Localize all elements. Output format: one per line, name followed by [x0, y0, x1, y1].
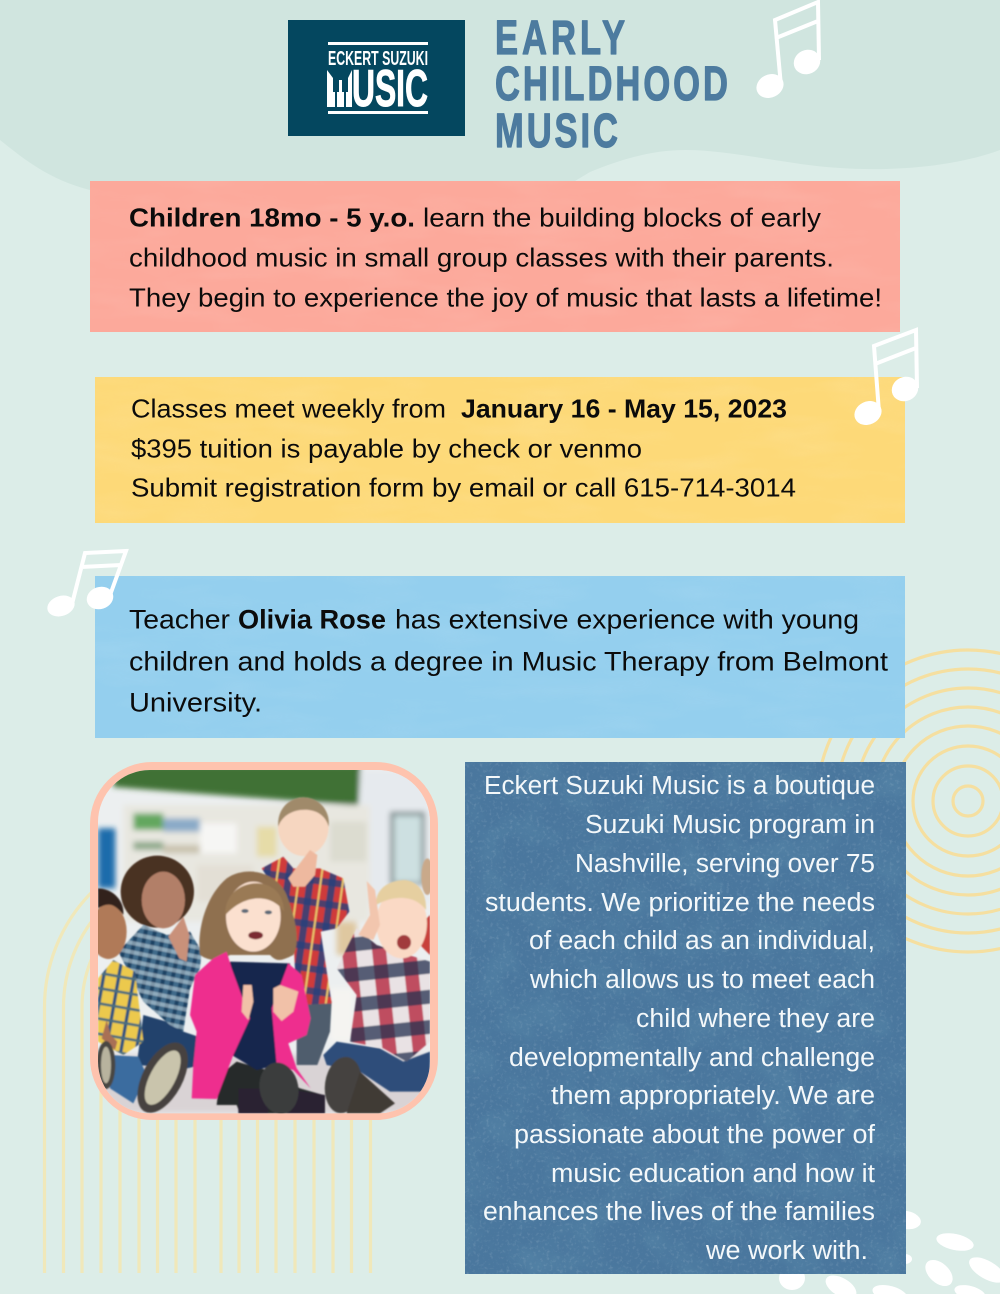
panel: intro: learn the building blocks of early: [423, 202, 821, 232]
panel: about program: them appropriately. We are: [551, 1082, 875, 1110]
panel: about program: Eckert Suzuki Music is a boutique: [484, 772, 875, 800]
title: EARLY: [495, 10, 625, 64]
white dots decoration: [779, 1209, 1000, 1294]
panel: about program: we work with.: [705, 1237, 868, 1265]
concentric circles decoration: [817, 650, 1000, 952]
panel: about program: Suzuki Music program in: [585, 811, 875, 839]
child curly hair: [118, 856, 203, 1068]
panel: about program: Nashville, serving over 75: [575, 850, 875, 878]
title: CHILDHOOD: [495, 56, 728, 110]
panel: about program: of each child as an individual,: [529, 927, 875, 955]
panel: class details: Submit registration form by email or call 615-714-3014: [131, 472, 796, 502]
panel: about program: students. We prioritize the needs: [485, 889, 875, 917]
child far right: [420, 858, 430, 956]
panel: intro: They begin to experience the joy of music that lasts a lifetime!: [129, 282, 882, 312]
panel: about program: music education and how it: [551, 1160, 875, 1188]
child right boy: [323, 880, 430, 1092]
title: [495, 10, 728, 157]
panel: teacher: Teacher: [129, 604, 230, 634]
panel: class details: $395 tuition is payable by check or venmo: [131, 434, 642, 464]
panel: class details: Classes meet weekly from: [131, 394, 446, 424]
child centre girl: [190, 872, 323, 1113]
panel: about program: child where they are: [636, 1005, 875, 1033]
child left boy: [90, 888, 147, 1103]
panel: about program: enhances the lives of the families: [483, 1198, 875, 1226]
panel: intro: childhood music in small group classes with their parents.: [129, 242, 834, 272]
icon: music note middle: [850, 330, 922, 429]
icon: music note left: [45, 551, 126, 620]
panel: teacher: children and holds a degree in Music Therapy from Belmont: [129, 646, 889, 676]
shoes: [98, 1040, 396, 1114]
arches decoration: [44, 844, 370, 1273]
panel: class details: January 16 - May 15, 2023: [461, 394, 787, 424]
panel: about program: which allows us to meet each: [529, 966, 875, 994]
panel: intro: Children 18mo - 5 y.o.: [129, 202, 415, 232]
panel: about program: [465, 762, 906, 1274]
logo: [288, 20, 465, 136]
panel: intro: [90, 181, 900, 332]
panel: teacher: has extensive experience with young: [395, 604, 859, 634]
photo of children clapping: [90, 765, 434, 1121]
panel: about program: passionate about the power of: [514, 1121, 876, 1149]
panel: about program: developmentally and challenge: [509, 1044, 875, 1072]
panel: class details: [95, 377, 905, 523]
logo: ECKERT SUZUKI: [328, 48, 428, 70]
logo: USIC: [352, 60, 428, 118]
panel: teacher: University.: [129, 688, 262, 718]
child standing: [262, 797, 349, 1065]
icon: music note top: [752, 2, 824, 102]
panel: teacher: Olivia Rose: [238, 604, 386, 634]
title: MUSIC: [495, 103, 618, 157]
panel: teacher: [95, 576, 905, 738]
